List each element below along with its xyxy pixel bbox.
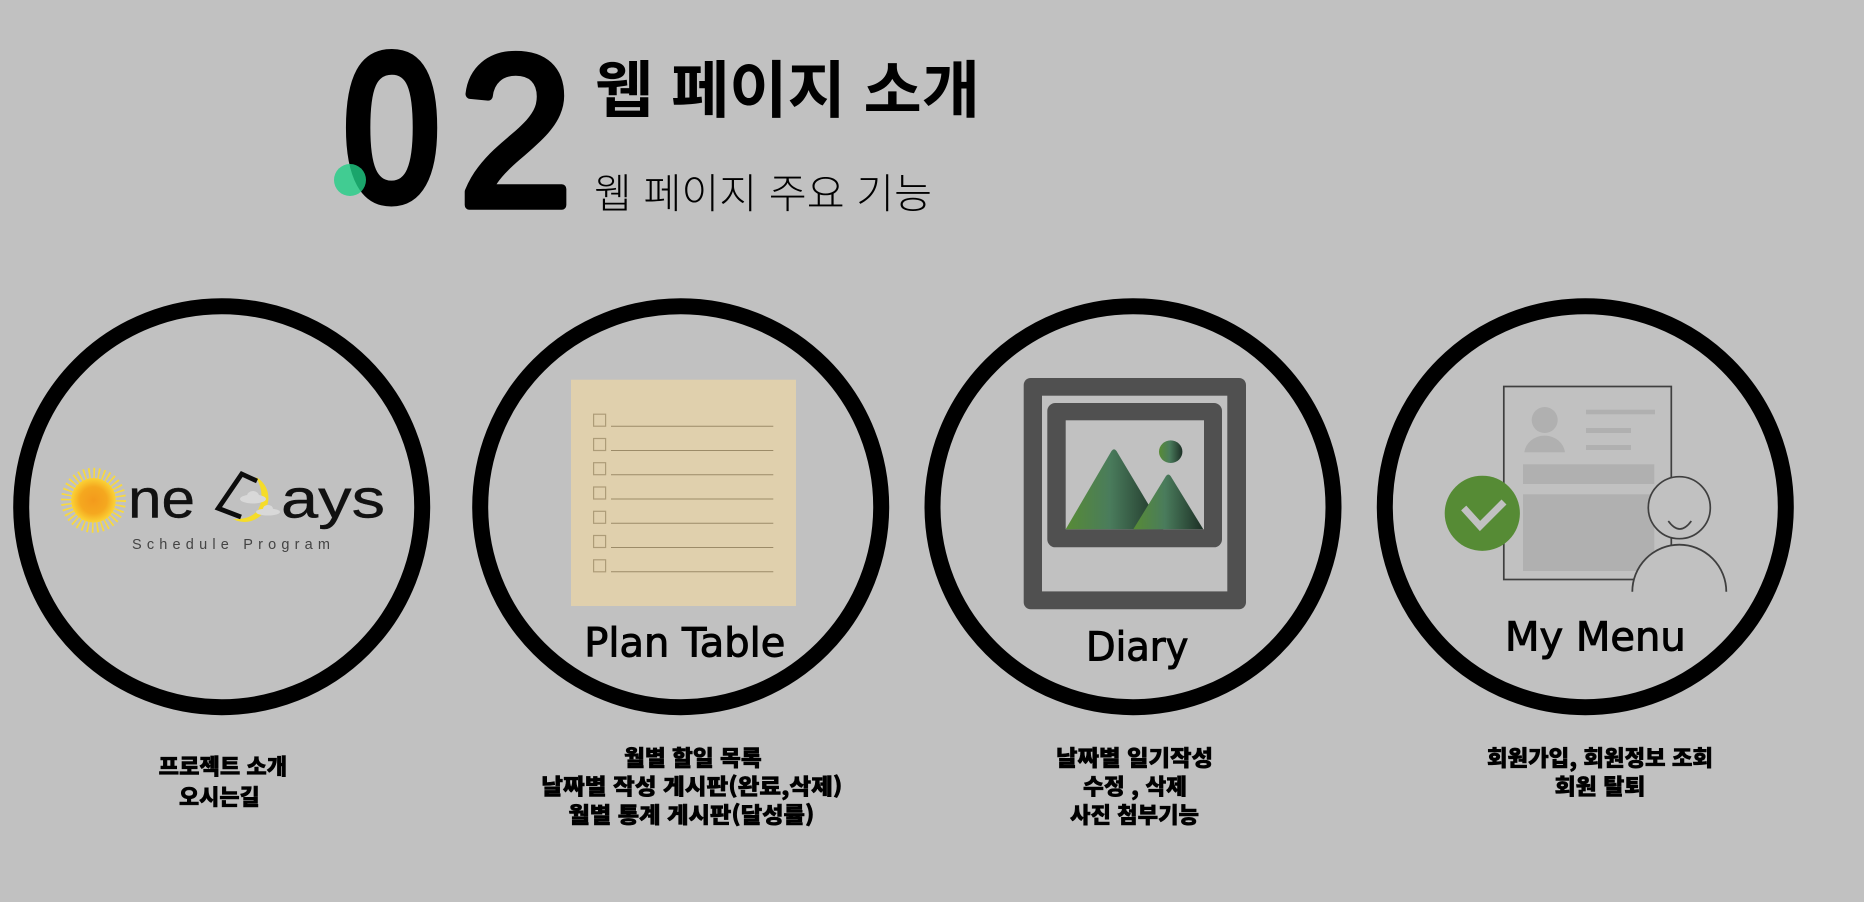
icon: mountains and sun (1066, 440, 1203, 529)
caption: plan table (541, 741, 842, 830)
logo tagline: Schedule Program (132, 537, 330, 553)
green accent dot (334, 164, 366, 196)
icon: sun (66, 473, 120, 527)
circle ring 3 (932, 306, 1334, 707)
icon: moon and D mark (218, 474, 280, 522)
caption: diary: 날짜별 일기작성 (1056, 741, 1213, 773)
panel: Plan Table (480, 306, 881, 830)
panel: My Menu (1385, 306, 1786, 802)
caption: my menu (1487, 741, 1713, 802)
subtitle: 웹 페이지 주요 기능 (594, 160, 932, 220)
caption: plan table: 월별 통계 게시판(달성률) (568, 798, 814, 830)
label: Plan Table: Plan Table (584, 621, 785, 667)
label: My Menu: My Menu (1505, 615, 1686, 661)
panel: One Days project (21, 306, 422, 812)
caption: plan table: 월별 할일 목록 (624, 741, 762, 773)
caption: diary: 수정 , 삭제 (1083, 770, 1187, 802)
icon: smiling person (1625, 477, 1735, 599)
caption: diary: 사진 첨부기능 (1070, 798, 1199, 830)
section number 02 (344, 12, 572, 251)
circle ring 4 (1385, 306, 1786, 707)
panel: Diary (932, 306, 1334, 830)
icon: green check badge (1445, 476, 1520, 551)
icon: member profile document (1504, 386, 1671, 580)
caption: project (159, 750, 287, 812)
logo word: ne: ne (128, 468, 195, 530)
caption: project: 프로젝트 소개 (159, 750, 287, 782)
section number 02: 0 (344, 13, 439, 244)
caption: diary (1056, 741, 1213, 830)
label: Diary: Diary (1086, 625, 1188, 671)
caption: my menu: 회원가입, 회원정보 조회 (1487, 741, 1713, 773)
section number 02: 2 (459, 12, 572, 251)
circle ring 2 (480, 306, 881, 707)
circle ring 1 (21, 306, 422, 707)
caption: plan table: 날짜별 작성 게시판(완료,삭제) (541, 770, 842, 802)
caption: my menu: 회원 탈퇴 (1555, 770, 1645, 802)
title: 웹 페이지 소개 (595, 40, 980, 130)
icon: checklist paper (571, 380, 796, 606)
caption: project: 오시는길 (179, 780, 260, 812)
logo word: ays: ays (281, 468, 385, 530)
icon: One Days logo (66, 468, 385, 553)
icon: photo frame (1024, 378, 1246, 609)
